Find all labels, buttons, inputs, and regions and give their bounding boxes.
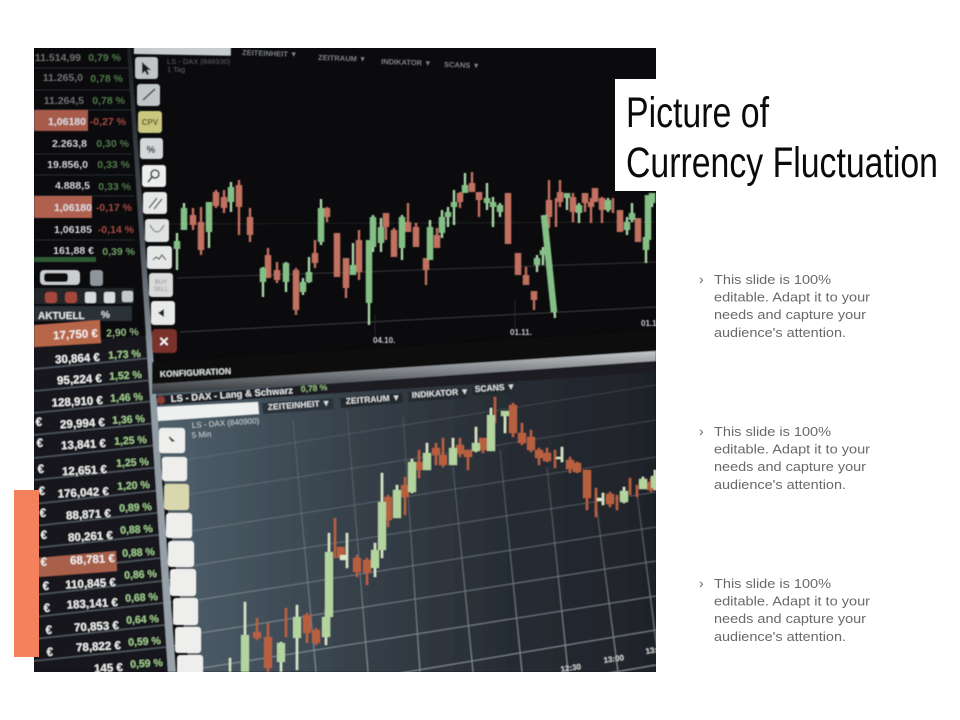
accent bar <box>14 490 39 657</box>
table: lower quotes: 70,853 € <box>74 620 120 634</box>
table: top quotes: 11.514,99 <box>35 52 81 64</box>
toolbar: lower chart buttons <box>159 428 203 675</box>
green candles: top chart <box>177 173 652 325</box>
table: top quotes: -0,14 % <box>98 224 135 236</box>
table: lower quotes: 0,59 % <box>130 657 164 671</box>
text block 1: needs and capture your <box>714 308 866 322</box>
candlestick chart: bottom (5 min) <box>230 397 655 672</box>
lower chart header: ZEITEINHEIT ▼ <box>267 398 331 412</box>
text block 3 <box>699 575 870 644</box>
table: top quotes: 0,78 % <box>92 95 126 107</box>
table: top quotes: -0,17 % <box>96 202 133 214</box>
table: top quotes: 4.888,5 <box>55 180 90 192</box>
top chart header labels: ZEITEINHEIT ▼ <box>242 48 298 59</box>
table: lower quotes: € <box>46 625 53 637</box>
top chart grid and date labels: 01.11. <box>510 328 532 337</box>
table: lower quotes: 176,042 € <box>57 486 110 501</box>
table: lower quotes: 145 € <box>94 662 124 676</box>
controls row under top quotes <box>34 270 134 322</box>
table: lower quotes: € <box>44 603 51 615</box>
lower chart header: LS - DAX - Lang & Schwarz <box>170 385 294 405</box>
top chart grid and date labels: 01.12 <box>641 319 662 328</box>
table: lower quotes: 88,871 € <box>66 508 112 522</box>
panel: lower left table background <box>34 335 175 672</box>
table: top quotes: 0,79 % <box>88 52 122 64</box>
table: lower quotes <box>34 320 164 676</box>
top chart header labels: LS - DAX (846930) <box>167 57 231 66</box>
table: top quotes: 0,30 % <box>96 138 130 150</box>
text block 1: This slide is 100% <box>714 273 831 287</box>
lower chart time labels <box>560 646 656 672</box>
lower chart header: 0,78 % <box>300 382 328 394</box>
table: top quotes <box>34 52 136 262</box>
text block 1: audience's attention. <box>714 326 846 340</box>
table: lower quotes: 30,864 € <box>55 352 101 366</box>
top chart header labels <box>133 48 479 74</box>
table: top quotes: -0,27 % <box>90 116 127 128</box>
text block 1: editable. Adapt it to your <box>714 291 870 305</box>
photo: trading screen with candlestick charts <box>34 44 662 702</box>
red candles: top chart <box>193 172 638 315</box>
controls row under top quotes: % <box>101 310 110 321</box>
lower chart header: SCANS ▼ <box>474 381 516 394</box>
text block 1: › <box>699 271 704 287</box>
table: top quotes: 11.265,0 <box>43 72 83 84</box>
table: lower quotes: 0,68 % <box>125 591 159 605</box>
toolbar: top chart buttons: × <box>159 332 169 351</box>
table: top quotes: 1,06185 <box>54 224 92 236</box>
table: lower quotes: 0,86 % <box>124 568 158 582</box>
table: lower quotes: 0,59 % <box>128 635 162 649</box>
table: lower quotes: 183,141 € <box>66 597 119 612</box>
table: top quotes: 0,33 % <box>97 159 131 171</box>
toolbar: top chart buttons <box>135 57 177 353</box>
table: lower quotes: 1,73 % <box>108 348 142 362</box>
lower chart header: LS - DAX (840900) <box>192 416 260 430</box>
table: lower quotes: 13,841 € <box>61 438 107 452</box>
table: top quotes: 11.264,5 <box>44 95 84 107</box>
table: lower quotes: 1,52 % <box>109 369 143 383</box>
table: lower quotes: 17,750 € <box>53 328 99 342</box>
controls row under top quotes: AKTUELL <box>38 311 85 322</box>
text block 3: This slide is 100% <box>714 577 831 591</box>
lower chart time labels: 13: <box>645 645 658 656</box>
table: lower quotes: 0,88 % <box>122 546 156 560</box>
table: lower quotes: 1,20 % <box>117 479 151 493</box>
table: top quotes: 2.263,8 <box>52 138 87 150</box>
table: lower quotes: 1,36 % <box>112 413 146 427</box>
table: lower quotes: € <box>38 464 45 476</box>
title <box>615 79 938 191</box>
table: lower quotes: € <box>43 581 50 593</box>
table: top quotes: 0,78 % <box>90 73 124 85</box>
table: lower quotes: € <box>37 438 44 450</box>
lower chart time labels: 12:30 <box>560 662 582 674</box>
table: lower quotes: 95,224 € <box>57 373 103 387</box>
lower chart header: 5 Min <box>192 430 212 440</box>
toolbar: top chart buttons: SELL <box>154 287 169 293</box>
table: lower quotes: 80,261 € <box>68 530 114 544</box>
table: lower quotes: € <box>41 557 48 569</box>
table: top quotes: 0,33 % <box>98 181 132 193</box>
top chart header labels: ZEITRAUM ▼ <box>318 53 366 64</box>
panel divider: configuration band <box>152 340 656 394</box>
table: lower quotes: 1,46 % <box>110 391 144 405</box>
toolbar: top chart buttons: BUY <box>155 280 167 286</box>
top chart grid and date labels: 04.10. <box>373 336 395 345</box>
table: lower quotes: 29,994 € <box>60 417 106 431</box>
toolbar: top chart buttons: CPV <box>142 118 159 127</box>
table: lower quotes: € <box>47 647 54 659</box>
title: Picture of <box>626 89 770 137</box>
text block 2 <box>699 423 870 492</box>
table: top quotes: 161,88 € <box>53 245 94 257</box>
panel divider: configuration band: KONFIGURATION <box>160 366 231 379</box>
text block 1 <box>699 271 870 340</box>
text block 2: needs and capture your <box>714 460 866 474</box>
table: top quotes: 19.856,0 <box>47 159 88 171</box>
table: lower quotes: 68,781 € <box>70 553 116 567</box>
text block 2: audience's attention. <box>714 478 846 492</box>
lower chart time labels: 13:00 <box>603 653 625 665</box>
text block 3: audience's attention. <box>714 630 846 644</box>
text block 2: This slide is 100% <box>714 425 831 439</box>
top chart grid and date labels <box>170 221 656 344</box>
toolbar: top chart buttons: % <box>147 145 156 156</box>
top chart header labels: SCANS ▼ <box>444 60 480 70</box>
table: top quotes: 0,39 % <box>102 246 136 258</box>
table: top quotes: 1,06180 <box>54 202 92 214</box>
panel: lower chart background <box>152 360 656 672</box>
table: lower quotes: 12,651 € <box>62 464 108 478</box>
lower chart header <box>156 361 656 440</box>
table: lower quotes: € <box>41 530 48 542</box>
lower chart header: INDIKATOR ▼ <box>411 386 469 400</box>
text block 2: › <box>699 423 704 439</box>
text block 3: needs and capture your <box>714 612 866 626</box>
lower chart header: ZEITRAUM ▼ <box>345 392 401 406</box>
text block 2: editable. Adapt it to your <box>714 443 870 457</box>
table: lower quotes: 78,822 € <box>76 640 122 654</box>
top chart header labels: INDIKATOR ▼ <box>381 57 432 68</box>
top chart header labels: 1 Tag <box>167 65 185 74</box>
table: lower quotes: 2,90 % <box>106 326 140 340</box>
table: lower quotes: 0,88 % <box>120 523 154 537</box>
candlestick chart: top (daily) <box>177 172 652 325</box>
table: lower quotes: € <box>36 417 43 429</box>
table: lower quotes: 0,89 % <box>119 501 153 515</box>
table: lower quotes: 1,25 % <box>114 434 148 448</box>
table: top quotes: 1,06180 <box>48 116 86 128</box>
lower chart grid <box>188 384 656 672</box>
grey divider strip <box>127 48 176 672</box>
text block 3: editable. Adapt it to your <box>714 595 870 609</box>
text block 3: › <box>699 575 704 591</box>
table: lower quotes: 1,25 % <box>116 456 150 470</box>
table: lower quotes: € <box>39 486 46 498</box>
table: lower quotes: 110,845 € <box>65 577 117 592</box>
green candles: bottom chart <box>230 408 655 672</box>
table: lower quotes: 128,910 € <box>51 395 104 410</box>
table: lower quotes: € <box>40 508 47 520</box>
table: lower quotes: 0,64 % <box>126 613 160 627</box>
red candles: bottom chart <box>257 397 651 672</box>
